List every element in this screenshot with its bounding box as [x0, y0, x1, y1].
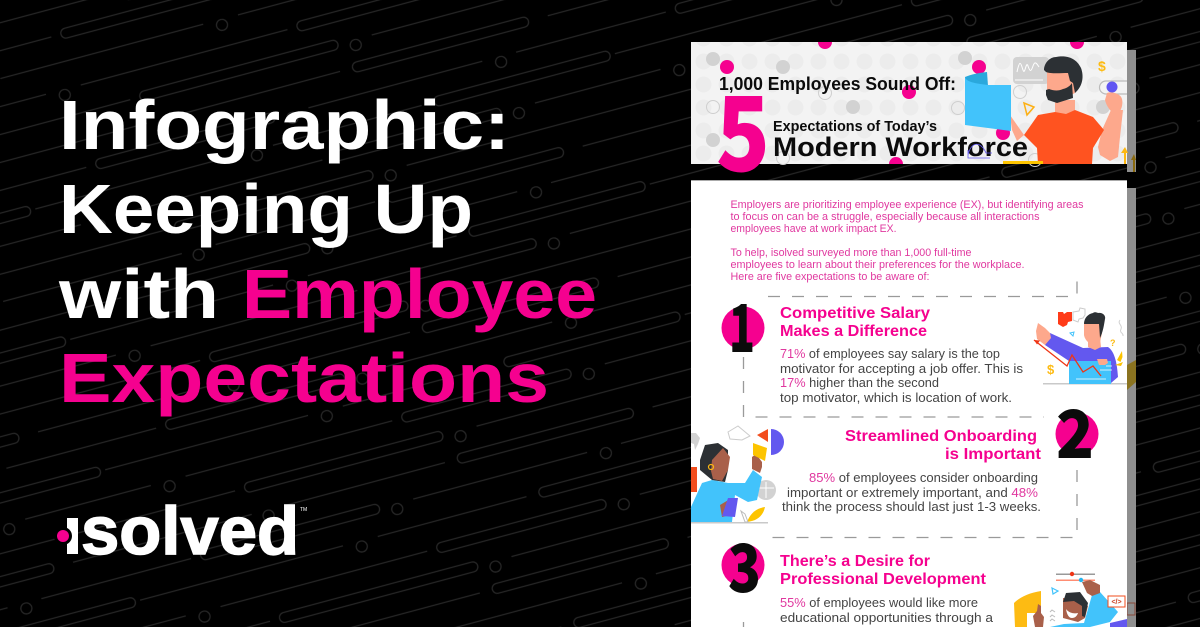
header text: 1,000 Employees Sound Off: [719, 74, 956, 94]
header dot pattern [691, 42, 1127, 166]
intro text: Here are five expectations to be aware of: [730, 271, 930, 283]
title: with [58, 255, 219, 333]
infographic shadow [1127, 50, 1136, 627]
section 1 body: top motivator, which is location of work. [780, 391, 1012, 405]
section 1 body: motivator for accepting a job offer. This is [780, 362, 1023, 376]
title: Employee [242, 255, 597, 333]
icon: yellow tab [1003, 161, 1043, 164]
illustration: woman with pie chart [691, 426, 784, 524]
title [58, 86, 597, 417]
icon: triangle [1024, 103, 1034, 115]
section 2 body: think the process should last just 1-3 weeks. [782, 500, 1041, 514]
intro text: to focus on can be a struggle, especially because all interactions [730, 211, 1040, 223]
illustration: woman pointing at chart: ? [1110, 338, 1116, 348]
icon: slider [1100, 81, 1127, 94]
section 2 body: 85% of employees consider onboarding [809, 471, 1038, 485]
icon: blue paper [965, 72, 1011, 131]
title: Expectations [59, 339, 549, 417]
section 3 body: 55% of employees would like more [780, 596, 978, 610]
section 3 body [780, 596, 993, 625]
section 1 body: 71% of employees say salary is the top [780, 347, 1000, 361]
intro text [730, 199, 1084, 283]
section 3 heading: There’s a Desire for [780, 553, 930, 570]
panel: infographic body [691, 180, 1127, 627]
number 2 badge: 2 [1056, 382, 1094, 478]
icon: scribble chart [968, 144, 992, 158]
section 1 heading: Makes a Difference [780, 323, 927, 340]
header text: Modern Workforce [773, 132, 1028, 162]
section 3: professional development [722, 516, 1127, 627]
title: Infographic: [59, 86, 510, 164]
section 2 body: important or extremely important, and 48% [787, 486, 1038, 500]
dashed connector lines [744, 279, 1077, 627]
panel: infographic header [691, 42, 1128, 166]
icon: chart card [1013, 57, 1049, 84]
header text: Expectations of Today’s [773, 119, 937, 135]
illustration: bearded man [1010, 56, 1123, 164]
intro text: To help, isolved surveyed more than 1,000 full-time [730, 247, 972, 259]
number 3 badge: 3 [728, 516, 761, 612]
section 3 body: educational opportunities through a [780, 611, 993, 625]
section 1 heading [780, 305, 930, 340]
section 1: competitive salary [722, 276, 1127, 405]
pink number 5: 5 [716, 52, 770, 201]
illustration: man with sliders: </> [1111, 599, 1122, 606]
illustration: woman pointing at chart: $ [1047, 362, 1055, 377]
section 1 body [780, 347, 1023, 405]
icon: dollar sign: $ [1098, 58, 1106, 74]
intro text: employees have at work impact EX. [730, 223, 896, 235]
title: Keeping Up [59, 170, 473, 248]
section 3 heading: Professional Development [780, 571, 987, 588]
section 2 heading: is Important [945, 446, 1042, 463]
isolved logo: TM [300, 507, 307, 513]
section 1 heading: Competitive Salary [780, 305, 930, 322]
section 2 heading [845, 428, 1042, 463]
section 2: streamlined onboarding [691, 382, 1098, 524]
illustration: woman pointing at chart [1034, 308, 1127, 384]
header text [719, 74, 1028, 162]
section 2 body [782, 471, 1041, 514]
intro text: Employers are prioritizing employee experience (EX), but identifying areas [730, 199, 1084, 211]
number 1 badge: 1 [729, 276, 755, 372]
isolved logo: solved [81, 493, 299, 569]
illustration: man with sliders [1014, 572, 1127, 627]
intro text: employees to learn about their preferences for the workplace. [730, 259, 1024, 271]
section 3 heading [780, 553, 987, 588]
section 2 heading: Streamlined Onboarding [845, 428, 1037, 445]
icon: yellow arrow [1121, 147, 1128, 164]
section 1 body: 17% higher than the second [780, 376, 939, 390]
